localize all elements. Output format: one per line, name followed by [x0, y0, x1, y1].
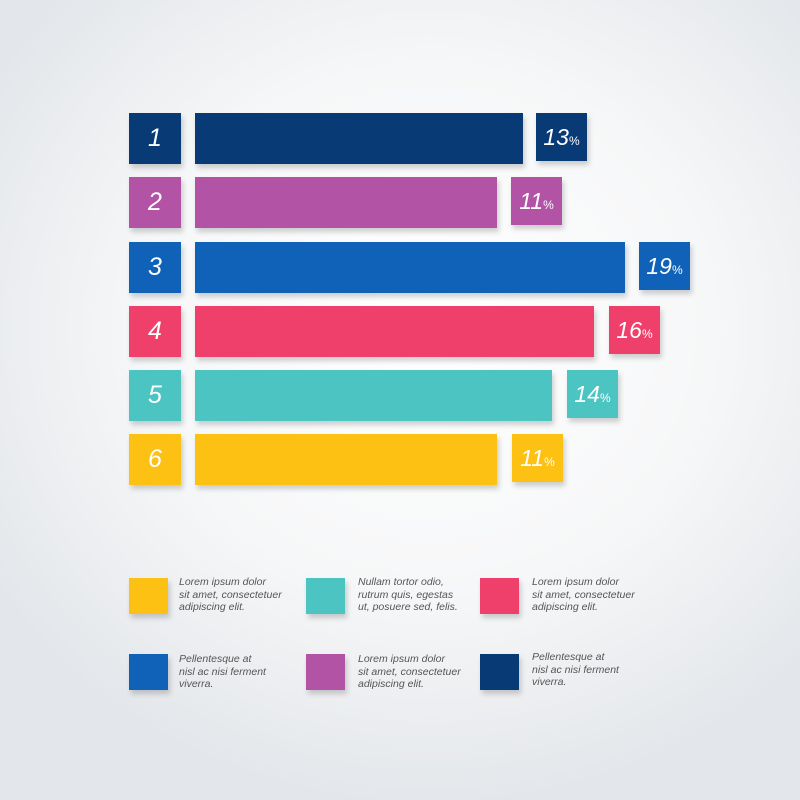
legend: sit amet, consectetuer	[358, 666, 461, 678]
legend: adipiscing elit.	[179, 601, 245, 613]
legend item teal	[306, 576, 458, 620]
legend: viverra.	[532, 676, 566, 688]
legend: rutrum quis, egestas	[358, 588, 453, 600]
chart: bars: 5	[148, 381, 162, 409]
chart: bars: 14%	[574, 381, 611, 407]
chart: bars: 11%	[519, 188, 554, 214]
chart: bars	[128, 113, 694, 492]
chart: bars: 4	[148, 317, 162, 345]
legend: sit amet, consectetuer	[532, 588, 635, 600]
legend: adipiscing elit.	[358, 678, 424, 690]
chart: bars: 19%	[646, 253, 683, 279]
legend: viverra.	[179, 678, 213, 690]
legend: adipiscing elit.	[532, 601, 598, 613]
chart: bars: 11%	[520, 445, 555, 471]
chart: bars: 16%	[616, 317, 653, 343]
row 5	[128, 370, 622, 428]
legend item blue	[128, 653, 266, 696]
chart: bars: 2	[148, 188, 162, 216]
row 6	[128, 434, 568, 492]
legend: sit amet, consectetuer	[179, 588, 282, 600]
legend: Lorem ipsum dolor	[179, 576, 266, 588]
legend: Pellentesque at	[532, 651, 604, 663]
chart: bars: 13%	[543, 124, 580, 150]
legend: ut, posuere sed, felis.	[358, 601, 458, 613]
legend item yellow	[128, 576, 282, 620]
legend item navy	[480, 651, 620, 696]
row 1	[128, 113, 592, 170]
legend: Lorem ipsum dolor	[358, 653, 445, 665]
legend	[128, 576, 636, 696]
legend: Nullam tortor odio,	[358, 576, 444, 588]
legend: nisl ac nisi ferment	[532, 664, 619, 676]
row 4	[128, 306, 664, 364]
legend: nisl ac nisi ferment	[179, 666, 266, 678]
chart: bars: 1	[148, 124, 162, 152]
legend item pink	[480, 576, 636, 620]
legend: Lorem ipsum dolor	[532, 576, 619, 588]
chart: bars: 6	[148, 445, 162, 473]
chart: bars: 3	[148, 253, 162, 281]
legend item purple	[306, 653, 462, 696]
row 3	[128, 242, 694, 300]
legend: Pellentesque at	[179, 653, 251, 665]
row 2	[128, 177, 566, 234]
